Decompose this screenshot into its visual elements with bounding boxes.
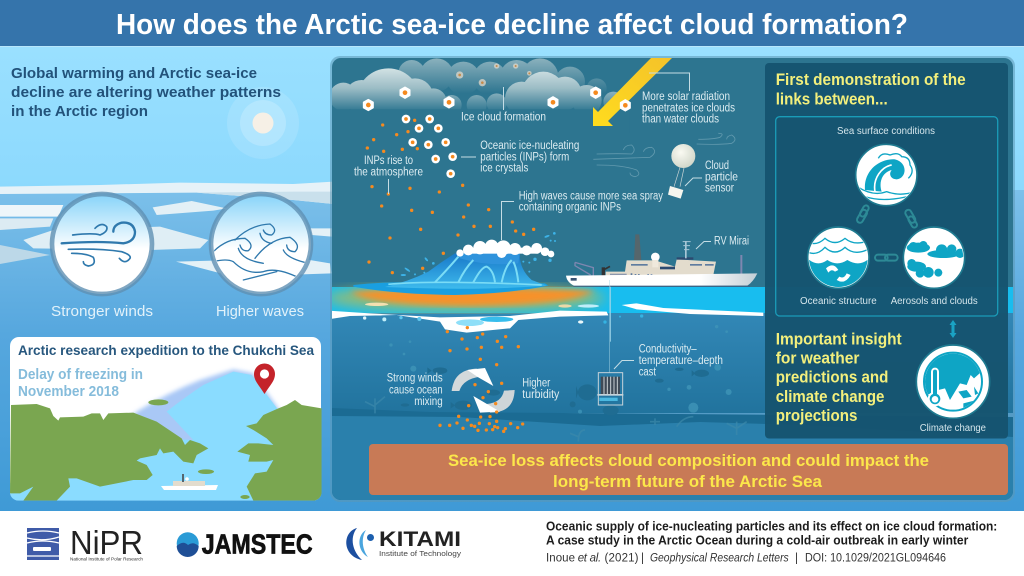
heading: first demonstration: First demonstration of the <box>776 70 966 89</box>
intro text: Global warming and Arctic sea-ice <box>11 65 257 82</box>
label: CTD cast: temperature–depth <box>639 355 723 367</box>
icon: aerosols and clouds <box>903 227 965 288</box>
heading: first demonstration <box>776 70 966 108</box>
citation: DOI: 10.1029/2021GL094646 <box>805 553 946 565</box>
ocean life and bubbles <box>365 325 747 442</box>
wind streaks <box>593 133 735 177</box>
water layer <box>332 287 1013 500</box>
label: higher waves: Higher waves <box>216 303 304 320</box>
heading: important insight: projections <box>776 406 857 425</box>
intro text <box>11 65 281 120</box>
map note <box>18 367 143 400</box>
label: ice cloud formation <box>461 87 546 124</box>
header bar with title: How does the Arctic sea-ice decline affect cloud formation? <box>116 9 908 41</box>
label: solar radiation: than water clouds <box>642 114 719 126</box>
research vessel RV Mirai <box>566 234 757 342</box>
map of the Chukchi Sea <box>10 369 322 501</box>
sun <box>227 87 299 159</box>
label: strong winds: mixing <box>414 396 443 408</box>
chain links <box>856 204 918 261</box>
citation: (2021) <box>604 553 639 565</box>
citation: | <box>795 553 798 565</box>
panel: key findings <box>765 63 1008 438</box>
label: high waves <box>502 190 663 240</box>
sea ice floes <box>0 182 333 277</box>
label: CTD cast: Conductivity– <box>639 344 697 356</box>
heading: important insight: for weather <box>776 348 860 367</box>
label: CTD cast <box>614 344 723 379</box>
label: oceanic INPs: particles (INPs) form <box>480 151 569 163</box>
citation: Inoue <box>546 553 575 565</box>
label: cloud particle sensor: particle <box>705 172 738 184</box>
conclusion banner: Sea-ice loss affects cloud composition and could impact the <box>448 451 929 470</box>
label: higher turbidity: Higher <box>522 377 550 389</box>
icon: higher waves <box>211 194 311 294</box>
label: high waves: High waves cause more sea spray <box>519 190 663 202</box>
footer <box>0 511 1024 576</box>
conclusion banner: long-term future of the Arctic Sea <box>553 472 823 491</box>
label: climate change: Climate change <box>920 423 986 434</box>
double-headed arrow <box>950 320 956 338</box>
heading: important insight: predictions and <box>776 368 888 387</box>
scene labels <box>354 73 749 408</box>
label: cloud particle sensor: Cloud <box>705 160 729 172</box>
logo: KITAMI <box>346 528 462 560</box>
map ship <box>161 474 218 490</box>
ice clouds <box>332 58 618 109</box>
header bar with title <box>0 0 1024 47</box>
citation: et al. <box>578 553 601 565</box>
melting sea ice <box>328 303 763 333</box>
map note: Delay of freezing in <box>18 367 143 383</box>
map title: Arctic research expedition to the Chukchi Sea <box>18 342 314 358</box>
conclusion banner <box>369 444 1008 495</box>
logo: KITAMI: KITAMI <box>379 528 461 551</box>
orange sea-surface organic layer <box>325 285 605 311</box>
label: oceanic INPs <box>461 140 579 175</box>
heading: important insight: climate change <box>776 387 884 406</box>
intro text: decline are altering weather patterns <box>11 84 281 101</box>
logo: KITAMI: Institute of Technology <box>379 551 462 558</box>
map pin <box>254 364 275 394</box>
label: INPs rise: INPs rise to <box>364 155 413 167</box>
mixing arrows <box>452 368 515 413</box>
label: sea surface conditions: Sea surface conditions <box>837 126 935 137</box>
label: strong winds: cause ocean <box>389 384 443 396</box>
label: cloud particle sensor <box>685 160 738 195</box>
label: high waves: containing organic INPs <box>519 202 621 214</box>
solar radiation arrow <box>593 58 672 126</box>
label: stronger winds: Stronger winds <box>51 303 153 320</box>
CTD cast instrument <box>597 280 623 405</box>
logo: JAMSTEC: JAMSTEC <box>202 528 313 559</box>
map note: November 2018 <box>18 384 119 400</box>
heading: important insight <box>776 329 902 425</box>
heading: first demonstration: links between... <box>776 89 888 108</box>
citation <box>546 520 997 565</box>
icon: climate change globe <box>916 345 990 418</box>
citation: Geophysical Research Letters <box>650 553 789 565</box>
label: solar radiation <box>642 73 735 126</box>
label: CTD cast: cast <box>639 367 657 379</box>
heading: important insight: Important insight <box>776 329 902 348</box>
label: strong winds: Strong winds <box>387 373 443 385</box>
citation: A case study in the Arctic Ocean during a cold-air outbreak in early winter <box>546 533 968 547</box>
label: oceanic structure: Oceanic structure <box>800 296 877 307</box>
panel: main scene <box>325 56 1015 502</box>
label: solar radiation: More solar radiation <box>642 91 730 103</box>
label: INPs rise: the atmosphere <box>354 167 423 179</box>
icon: oceanic structure <box>807 227 870 290</box>
label: INPs rise <box>354 155 423 194</box>
logo: NiPR <box>27 524 144 562</box>
intro text: in the Arctic region <box>11 103 148 120</box>
links diagram <box>776 117 998 316</box>
label: aerosols and clouds: Aerosols and clouds <box>891 296 978 307</box>
logo: NiPR: National Institute of Polar Research <box>70 556 144 562</box>
label: higher turbidity: turbidity <box>522 389 560 401</box>
label: strong winds <box>387 373 443 408</box>
citation: | <box>641 553 644 565</box>
rising INP particles <box>366 119 535 274</box>
label: RV Mirai <box>696 236 749 249</box>
panel: research expedition map <box>10 337 322 501</box>
breaking wave <box>353 232 556 295</box>
label: higher turbidity <box>522 377 560 401</box>
icon: sea surface wave <box>856 144 917 206</box>
particles in the ocean <box>438 326 524 433</box>
citation: Oceanic supply of ice-nucleating particles and its effect on ice cloud formation: <box>546 520 997 534</box>
label: ice cloud formation: Ice cloud formation <box>461 112 546 124</box>
ice crystals <box>364 63 630 178</box>
label: solar radiation: penetrates ice clouds <box>642 103 735 115</box>
logo: NiPR: NiPR <box>70 524 143 561</box>
label: RV Mirai: RV Mirai <box>714 236 749 248</box>
logo: JAMSTEC <box>177 528 313 559</box>
weather balloon with cloud particle sensor <box>668 144 695 199</box>
label: oceanic INPs: Oceanic ice-nucleating <box>480 140 579 152</box>
icon: stronger winds <box>52 194 152 294</box>
label: cloud particle sensor: sensor <box>705 183 734 195</box>
label: oceanic INPs: ice crystals <box>480 163 529 175</box>
